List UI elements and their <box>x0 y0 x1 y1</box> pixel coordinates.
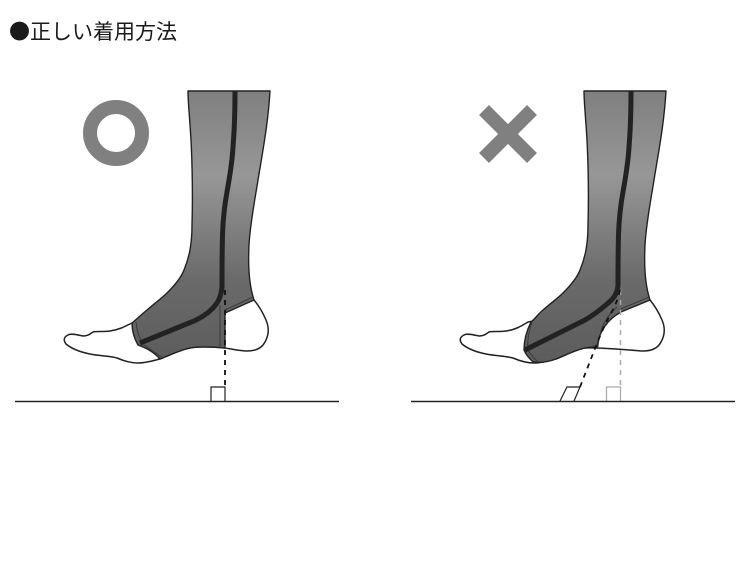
icon: incorrect cross <box>484 110 532 158</box>
panel: correct use <box>15 91 339 402</box>
sock hem lines <box>528 297 649 362</box>
ground line <box>15 400 339 402</box>
ground line <box>411 400 735 402</box>
title: ●正しい着用方法 <box>9 16 177 46</box>
vertical dashed line <box>224 290 226 387</box>
sock hem lines <box>136 297 253 358</box>
panel: incorrect use <box>411 91 735 402</box>
icon: correct circle <box>90 107 142 159</box>
tilted dashed line <box>580 290 620 387</box>
tilted angle mark <box>560 387 580 401</box>
seam stripe <box>140 91 235 343</box>
sock <box>132 91 270 359</box>
grey vertical dashed line <box>620 290 622 387</box>
grey right angle mark <box>606 387 620 401</box>
right angle mark <box>211 387 225 401</box>
foot outline <box>460 300 664 363</box>
sock <box>524 91 666 362</box>
seam stripe <box>525 91 631 350</box>
foot outline <box>64 300 268 363</box>
